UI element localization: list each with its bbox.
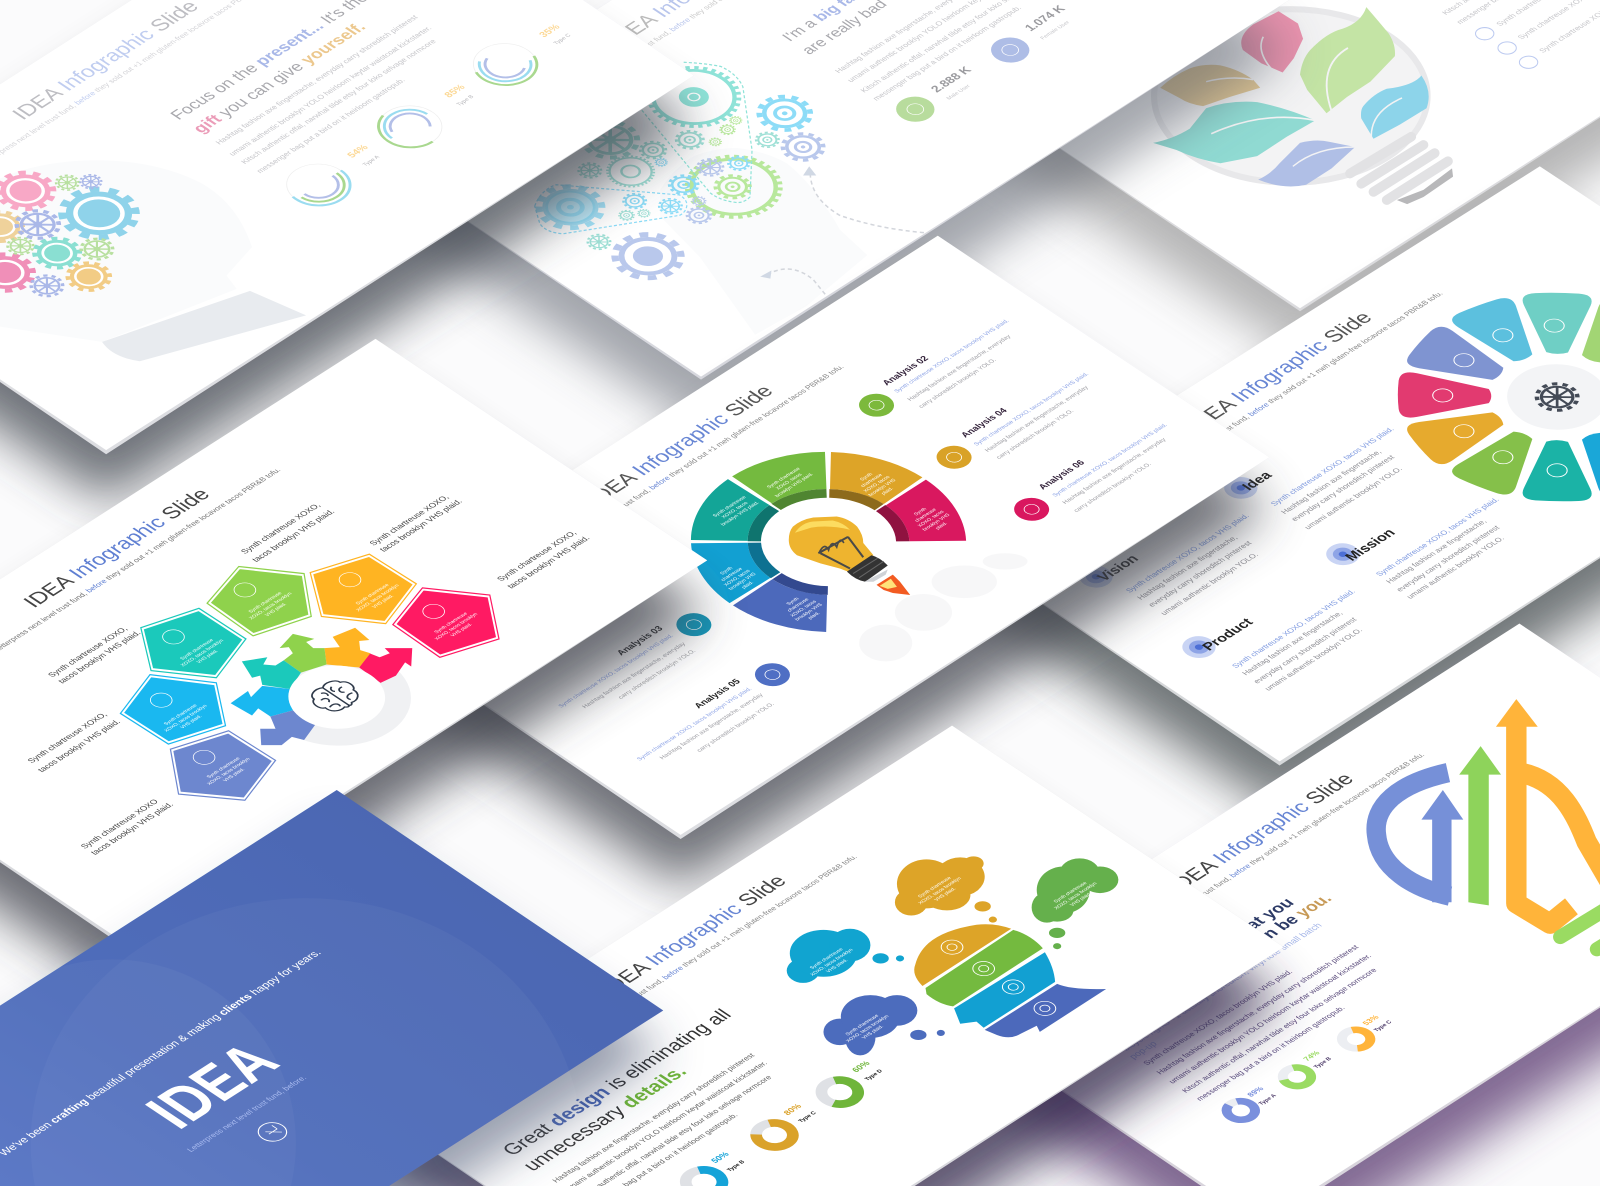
ring labels: brooklyn VHS bbox=[921, 512, 952, 532]
section: idea bbox=[1217, 426, 1404, 531]
callouts bbox=[26, 494, 592, 856]
analysis 06: Analysis 06 bbox=[1036, 458, 1087, 491]
section: mission bbox=[1319, 496, 1506, 600]
donut: type A: Type A bbox=[1258, 1093, 1278, 1106]
title: IDEA Infographic Slide bbox=[19, 485, 215, 611]
cloud labels: XOXO, tacos brooklyn bbox=[845, 1014, 891, 1043]
head silhouette bbox=[660, 148, 867, 335]
section: mission: everyday carry shoreditch pinterest bbox=[1394, 524, 1502, 593]
pentagon: green: XOXO, tacos brooklyn bbox=[248, 591, 294, 621]
subtitle: Letterpress next level trust fund, before they sold out +1 meh gluten-free locavore tacos PBR&B tofu. bbox=[554, 363, 846, 550]
stat: male user: Male User bbox=[946, 84, 972, 101]
section: product: Product bbox=[1198, 615, 1256, 653]
donut: type A: 89% bbox=[1245, 1085, 1266, 1098]
section: mission: Mission bbox=[1341, 526, 1398, 563]
stat: male user: 2.888 K bbox=[928, 64, 975, 95]
callouts: Synth chartreuse XOXO, bbox=[239, 502, 322, 555]
icon: gear globe bbox=[1528, 378, 1586, 416]
section: idea: everyday carry shoreditch pinterest bbox=[1289, 453, 1397, 523]
paragraph: umami authentic brooklyn YOLO heirloom keytar waistcoat kickstarter. bbox=[227, 25, 434, 157]
icon: brain bbox=[304, 676, 367, 717]
cloud labels: VHS plaid. bbox=[825, 958, 850, 974]
paragraph: Hashtag fashion axe fingerstache, everyday carry shoreditch pinterest bbox=[1154, 943, 1361, 1076]
analysis 05: Synth chartreuse XOXO, tacos brooklyn VHS plaid. bbox=[636, 687, 754, 762]
arrow chart bbox=[1376, 699, 1600, 949]
ring labels: chartreuse bbox=[860, 473, 884, 489]
pentagon: red: Synth chartreuse bbox=[434, 612, 469, 635]
section: product: Synth chartreuse XOXO, tacos VHS plaid. bbox=[1230, 588, 1357, 670]
ring labels: chartreuse bbox=[914, 507, 938, 523]
cloud labels bbox=[804, 873, 1104, 1047]
pentagon: blue: VHS plaid. bbox=[179, 714, 204, 730]
panel: rising arrows slide bbox=[930, 624, 1600, 1186]
cloud labels: Synth chartreuse bbox=[1053, 881, 1089, 904]
subtitle: Letterpress next level trust fund, before they sold out +1 meh gluten-free locavore tacos PBR&B tofu. bbox=[568, 853, 859, 1040]
paragraph: messenger bag put a bird on it heirloom gastropub. bbox=[1194, 1004, 1347, 1102]
pentagon: periwinkle: XOXO, tacos brooklyn bbox=[206, 757, 252, 786]
analysis 03: Synth chartreuse XOXO, tacos brooklyn VHS plaid. bbox=[558, 633, 675, 709]
callouts: Synth chartreuse XOXO, bbox=[26, 711, 109, 765]
cover tagline: We've been crafting beautiful presentation & making clients happy for years. bbox=[0, 948, 324, 1158]
callouts: tacos brooklyn VHS plaid. bbox=[378, 498, 464, 553]
section: vision: Synth chartreuse XOXO, tacos VHS plaid. bbox=[1124, 512, 1251, 594]
heading: unnecessary details. bbox=[518, 1063, 692, 1175]
callouts: Synth chartreuse XOXO bbox=[79, 798, 161, 850]
paragraph: Kitsch authentic offal, narwhal tilde etsy four loko selvage normcore bbox=[1180, 967, 1379, 1094]
section: product: umami authentic brooklyn YOLO. bbox=[1263, 627, 1364, 692]
heading bbox=[779, 0, 920, 57]
donut: type D bbox=[804, 1059, 884, 1115]
heading: Great design is eliminating all bbox=[498, 1006, 737, 1159]
brain arrow diagram bbox=[231, 628, 423, 753]
blue dashed belt bbox=[535, 185, 687, 234]
section: product bbox=[1175, 588, 1364, 692]
head illustration bbox=[914, 924, 1106, 1037]
gear cluster bbox=[0, 165, 151, 300]
heading: n be you. bbox=[1258, 891, 1336, 941]
pentagon: blue: XOXO, tacos brooklyn bbox=[163, 704, 209, 733]
section: mission: umami authentic brooklyn YOLO. bbox=[1404, 535, 1506, 600]
cloud labels: XOXO, tacos brooklyn bbox=[917, 876, 963, 906]
section: vision: umami authentic brooklyn YOLO. bbox=[1158, 551, 1260, 617]
paragraph: messenger bag put a bird on it heirloom gastropub. bbox=[871, 4, 1023, 102]
section: idea: umami authentic brooklyn YOLO. bbox=[1302, 465, 1404, 531]
donut: type C: 80% bbox=[781, 1102, 804, 1117]
paragraph: Hashtag fashion axe fingerstache, everyday carry shoreditch pinterest bbox=[214, 13, 421, 146]
arrowheads bbox=[760, 166, 816, 279]
title: IDEA Infographic Slide bbox=[8, 0, 204, 123]
donut: type B bbox=[1270, 1049, 1333, 1095]
paragraph: messenger bag put a bird on it heirloom gastropub. bbox=[254, 77, 407, 175]
analysis 04: Hashtag fashion axe fingerstache, everyday bbox=[984, 384, 1091, 453]
analysis 04 bbox=[929, 372, 1091, 473]
analysis 04: Analysis 04 bbox=[959, 406, 1010, 439]
ring chart: type B bbox=[365, 83, 476, 156]
analysis 04: carry shoreditch brooklyn YOLO. bbox=[995, 408, 1076, 460]
section: product: Hashtag fashion axe fingerstache, bbox=[1240, 610, 1345, 677]
section: vision: Vision bbox=[1093, 552, 1142, 583]
section: vision: everyday carry shoreditch pinterest bbox=[1146, 539, 1254, 608]
cloud labels: Synth chartreuse bbox=[809, 948, 845, 971]
pentagon: green bbox=[207, 566, 311, 636]
pentagon: periwinkle: VHS plaid. bbox=[222, 767, 247, 783]
ring chart: type C bbox=[448, 23, 573, 102]
callouts: tacos brooklyn VHS plaid. bbox=[505, 534, 592, 590]
analysis 05: Analysis 05 bbox=[692, 677, 742, 710]
section: vision bbox=[1072, 512, 1260, 617]
paragraph: Hashtag fashion axe fingerstache, everyday carry shoreditch pinterest bbox=[550, 1051, 757, 1184]
panel: blue cover slide bbox=[0, 790, 663, 1186]
icon: down arrow bbox=[252, 1119, 293, 1145]
donut: type A bbox=[1213, 1085, 1278, 1128]
section: product: everyday carry shoreditch pinterest bbox=[1251, 615, 1359, 685]
stat: male user bbox=[888, 64, 975, 127]
analysis 05 bbox=[636, 658, 797, 762]
ring labels: brooklyn VHS bbox=[728, 572, 758, 591]
pentagon: blue bbox=[120, 675, 226, 744]
analysis 02: Synth chartreuse XOXO, tacos brooklyn VHS plaid. bbox=[894, 319, 1011, 394]
icon: bulb screw base bbox=[1350, 137, 1448, 200]
analysis 03: Analysis 03 bbox=[614, 624, 665, 657]
subtitle: Letterpress next level trust fund, before they sold out +1 meh gluten-free locavore tacos PBR&B tofu. bbox=[1153, 290, 1445, 477]
callouts: Synth chartreuse XOXO, bbox=[46, 625, 130, 679]
ring labels: Synth chartreuse bbox=[713, 496, 748, 518]
ring labels: brooklyn VHS plaid. bbox=[774, 472, 815, 498]
ring labels: XOXO, tacos bbox=[917, 509, 946, 528]
donut: type B: 74% bbox=[1301, 1049, 1322, 1063]
segmented ring chart bbox=[610, 399, 1047, 685]
icon: bulb base shade bbox=[1397, 168, 1453, 204]
cover subtitle: Letterpress next level trust fund, before. bbox=[185, 1074, 309, 1153]
ring labels: Synth bbox=[860, 473, 874, 482]
ring chart: type C: 35% bbox=[537, 23, 563, 39]
analysis 06: Hashtag fashion axe fingerstache, everyday bbox=[1061, 436, 1168, 505]
analysis 06: carry shoreditch brooklyn YOLO. bbox=[1072, 461, 1153, 513]
callouts: tacos brooklyn VHS plaid. bbox=[89, 801, 175, 856]
stat: female user: 1.074 K bbox=[1021, 3, 1068, 33]
icon: light bulb glass bbox=[1154, 9, 1428, 183]
analysis 03: carry shoreditch brooklyn YOLO. bbox=[617, 648, 698, 700]
pentagon: red: VHS plaid. bbox=[450, 622, 474, 638]
icon: green leaf bbox=[1300, 7, 1395, 113]
ring labels: brooklyn VHS bbox=[794, 602, 825, 622]
ring labels: Synth bbox=[720, 567, 734, 576]
ring chart: type B: 85% bbox=[442, 83, 468, 100]
icon: tan leaf bbox=[1160, 65, 1260, 106]
head silhouette bbox=[0, 160, 252, 342]
callouts: Synth chartreuse XOXO, bbox=[368, 494, 451, 547]
cloud labels: Synth chartreuse bbox=[845, 1014, 881, 1037]
pentagon: orange: Synth chartreuse bbox=[355, 583, 391, 606]
teal dashed belt bbox=[642, 62, 752, 203]
donut: type B bbox=[669, 1150, 747, 1186]
donut: type C: Type C bbox=[798, 1111, 818, 1124]
title: IDEA Infographic Slide bbox=[1181, 309, 1377, 435]
pentagon: teal: Synth chartreuse bbox=[180, 639, 215, 661]
analysis 02 bbox=[852, 319, 1013, 421]
wheel chart bbox=[1327, 246, 1600, 548]
donut: type B: 50% bbox=[709, 1150, 732, 1165]
ring labels: XOXO, tacos bbox=[721, 501, 750, 520]
title: IDEA Infographic Slide bbox=[596, 872, 792, 998]
analysis 05: carry shoreditch brooklyn YOLO. bbox=[695, 701, 776, 753]
panel: wheel slide with vision and mission bbox=[948, 166, 1600, 812]
panel: light bulb ring slide bbox=[349, 236, 1269, 886]
cloud: green bbox=[1032, 858, 1118, 923]
analysis 06: Synth chartreuse XOXO, tacos brooklyn VHS plaid. bbox=[1052, 423, 1169, 498]
analysis 02: Hashtag fashion axe fingerstache, everyday bbox=[906, 333, 1013, 402]
analysis 03: Hashtag fashion axe fingerstache, everyday bbox=[581, 641, 688, 710]
ring labels: brooklyn VHS bbox=[867, 478, 898, 497]
cloud labels: XOXO, tacos brooklyn bbox=[809, 948, 855, 977]
ring labels: Synth bbox=[786, 597, 801, 607]
analysis 05: Hashtag fashion axe fingerstache, everyday bbox=[658, 692, 766, 761]
icon: teal leaf bbox=[1153, 102, 1315, 163]
analysis 02: carry shoreditch brooklyn YOLO. bbox=[917, 357, 998, 409]
ring chart: type B: Type B bbox=[456, 94, 476, 107]
analysis 02: Analysis 02 bbox=[880, 354, 931, 387]
donut: type D: 60% bbox=[849, 1059, 872, 1074]
blue lead text: bicycle rights +1 actually shoreditch, vinyl tote small batch bbox=[1120, 921, 1324, 1052]
donut: type C: Type C bbox=[1373, 1020, 1394, 1033]
ring labels: Synth chartreuse bbox=[767, 467, 802, 490]
paragraph: Synth chartreuse XOXO, tacos brooklyn VHS plaid. bbox=[1141, 968, 1295, 1067]
ring labels: plaid. bbox=[741, 580, 755, 590]
ring chart: type A bbox=[274, 143, 382, 214]
ring labels: XOXO, tacos bbox=[723, 568, 752, 587]
panel: head clouds slide bbox=[362, 726, 1284, 1186]
ring labels: brooklyn VHS plaid. bbox=[720, 501, 761, 527]
pentagon: periwinkle bbox=[170, 731, 276, 800]
ring labels: XOXO, tacos bbox=[789, 599, 819, 618]
subtitle: Letterpress next level trust fund, before they sold out +1 meh gluten-free locavore tacos PBR&B tofu. bbox=[1135, 751, 1427, 938]
head neck bbox=[102, 291, 306, 361]
pentagon: blue: Synth chartreuse bbox=[164, 704, 199, 727]
pentagon: teal bbox=[141, 608, 246, 678]
section: idea: Idea bbox=[1238, 468, 1275, 493]
clouds bbox=[859, 553, 1028, 661]
blue lead text: pop-up bbox=[1127, 1040, 1159, 1061]
paragraph: Kitsch authentic offal, narwhal tilde etsy four loko selvage normcore bbox=[239, 38, 438, 165]
icon: periwinkle leaf bbox=[1258, 141, 1355, 186]
cloud: blue bbox=[787, 929, 870, 983]
donut: type C bbox=[739, 1102, 818, 1158]
pentagon: teal: VHS plaid. bbox=[195, 649, 220, 665]
callouts: tacos brooklyn VHS plaid. bbox=[56, 629, 143, 685]
cover decoration bbox=[0, 898, 582, 1186]
icon: pink leaf bbox=[1241, 11, 1303, 75]
panel: pentagon brain slide bbox=[0, 339, 707, 989]
ring chart: type A: Type A bbox=[362, 155, 382, 167]
icon: blue leaf bbox=[1361, 76, 1429, 139]
cloud: gold bbox=[895, 856, 985, 916]
cloud labels: VHS plaid. bbox=[933, 887, 958, 902]
section: idea: Hashtag fashion axe fingerstache, bbox=[1279, 448, 1383, 516]
cloud labels: Synth chartreuse bbox=[918, 876, 953, 899]
ring labels: plaid. bbox=[934, 521, 949, 531]
pentagon: green: Synth chartreuse bbox=[248, 592, 284, 614]
cloud: navy bbox=[823, 995, 917, 1055]
paragraph: umami authentic brooklyn YOLO heirloom keytar waistcoat kickstarter. bbox=[1167, 952, 1373, 1085]
stat: female user bbox=[983, 3, 1072, 68]
thought dots bbox=[872, 901, 1065, 1040]
analysis 03 bbox=[558, 608, 719, 710]
title: IDEA Infographic Slide bbox=[1163, 770, 1359, 896]
ring labels bbox=[709, 465, 958, 626]
pentagon: green: VHS plaid. bbox=[264, 602, 288, 618]
cloud labels: VHS plaid. bbox=[861, 1024, 885, 1040]
cloud labels: VHS plaid. bbox=[1069, 892, 1093, 908]
pentagon: orange bbox=[310, 554, 416, 624]
heading: at you bbox=[1241, 895, 1298, 932]
section: vision: Hashtag fashion axe fingerstache, bbox=[1135, 534, 1240, 601]
section: idea: Synth chartreuse XOXO, tacos VHS plaid. bbox=[1269, 426, 1396, 507]
ring labels: plaid. bbox=[880, 486, 895, 496]
donut: type B: Type B bbox=[726, 1160, 747, 1173]
ring chart: type C: Type C bbox=[553, 33, 573, 46]
pentagon: periwinkle: Synth chartreuse bbox=[206, 757, 242, 780]
donut: type D: Type D bbox=[864, 1069, 884, 1082]
cloud labels: XOXO, tacos brooklyn bbox=[1053, 881, 1099, 911]
pentagon: orange: XOXO, tacos brooklyn bbox=[355, 583, 401, 613]
ring labels: plaid. bbox=[807, 611, 822, 621]
donut: type C: 53% bbox=[1360, 1013, 1381, 1027]
heading: gift you can give yourself. bbox=[188, 19, 370, 136]
ring labels: Synth bbox=[914, 507, 928, 517]
pentagon: orange: VHS plaid. bbox=[371, 594, 395, 609]
dashed arrow to head bbox=[767, 174, 924, 296]
panel: light bulb leaves slide bbox=[968, 0, 1600, 357]
ring labels: XOXO, tacos bbox=[775, 472, 804, 491]
pentagon: teal: XOXO, tacos brooklyn bbox=[180, 638, 226, 668]
gear cluster bbox=[526, 55, 832, 287]
ring labels: chartreuse bbox=[786, 597, 811, 613]
analysis 04: Synth chartreuse XOXO, tacos brooklyn VHS plaid. bbox=[973, 372, 1091, 447]
section: mission: Synth chartreuse XOXO, tacos VHS plaid. bbox=[1374, 496, 1501, 578]
checklist bbox=[1440, 0, 1600, 68]
callouts: tacos brooklyn VHS plaid. bbox=[250, 508, 337, 563]
icon: rocket light bulb bbox=[789, 516, 910, 595]
ring labels: XOXO, tacos bbox=[863, 475, 892, 494]
ring chart: type A: 54% bbox=[345, 143, 371, 160]
section: mission: Hashtag fashion axe fingerstache, bbox=[1384, 518, 1489, 585]
donut: type B: Type B bbox=[1313, 1057, 1333, 1070]
panel: focus on the present gears slide bbox=[0, 0, 694, 501]
stat: female user: Female User bbox=[1040, 20, 1072, 41]
callouts: Synth chartreuse XOXO, bbox=[495, 529, 579, 583]
head icons bbox=[937, 937, 1060, 1018]
analysis 06 bbox=[1007, 423, 1169, 526]
ring labels: chartreuse bbox=[720, 567, 744, 582]
pentagon: red: XOXO, tacos brooklyn bbox=[434, 612, 480, 641]
cover title: IDEA bbox=[132, 1033, 294, 1139]
panel: big fan gears slide bbox=[369, 0, 1291, 430]
title: IDEA Infographic Slide bbox=[582, 382, 778, 508]
callouts: tacos brooklyn VHS plaid. bbox=[36, 718, 122, 774]
pentagon: red bbox=[393, 588, 499, 657]
wheel hub bbox=[1486, 351, 1600, 443]
donut: type C bbox=[1329, 1013, 1394, 1057]
